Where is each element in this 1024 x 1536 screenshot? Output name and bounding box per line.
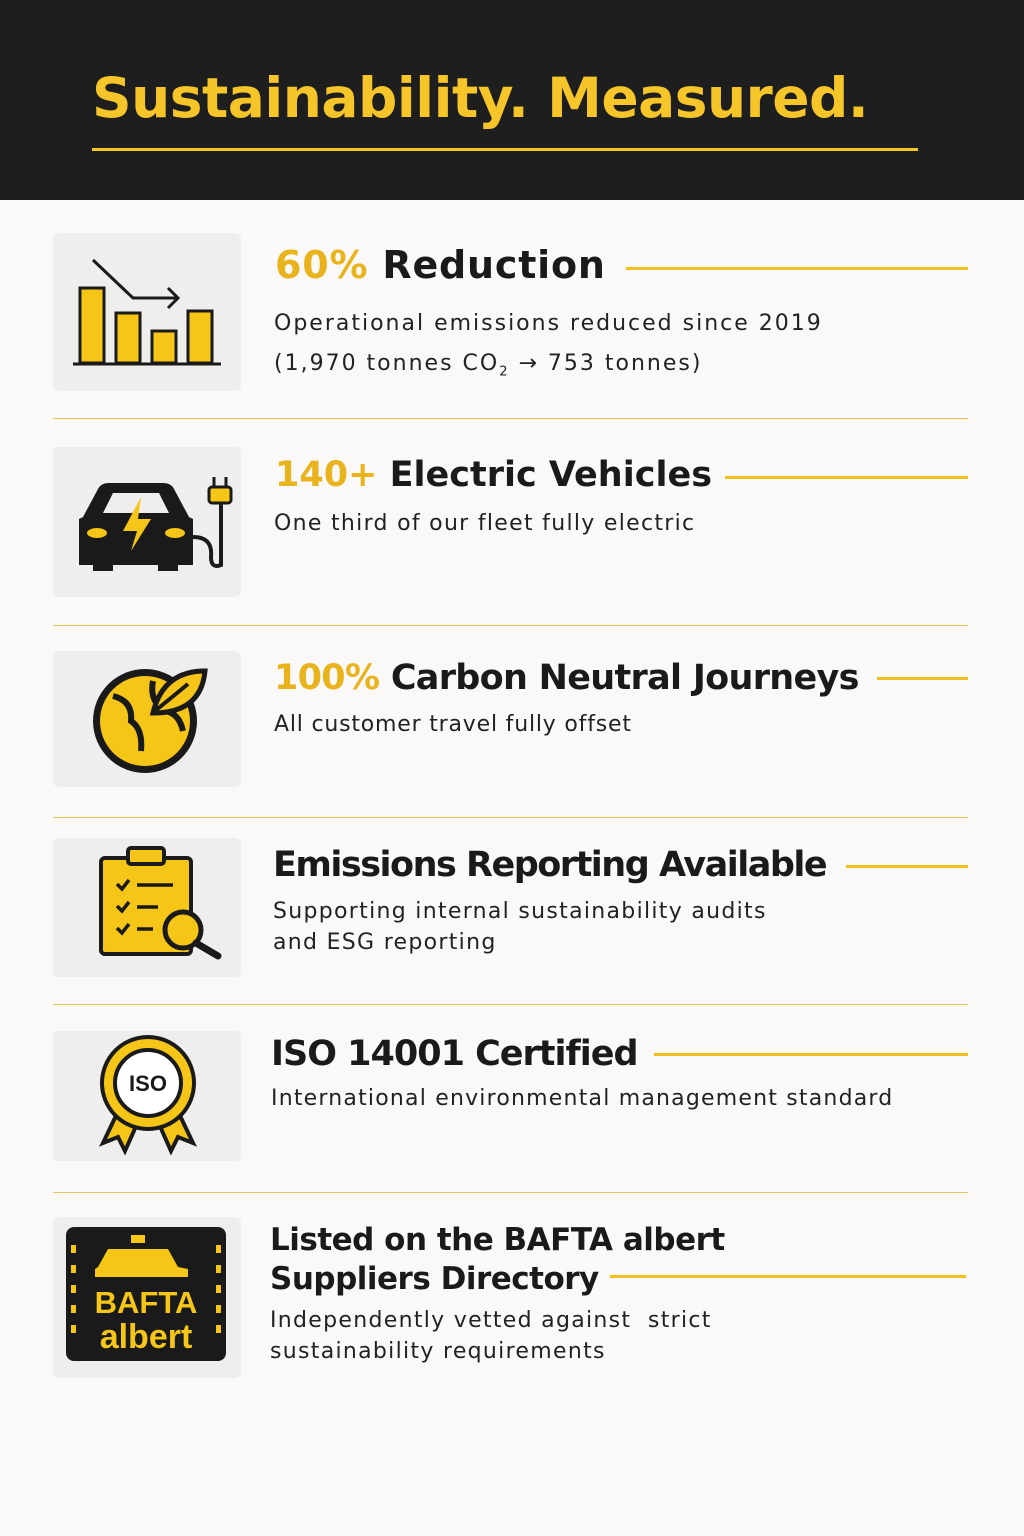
- icon: ISO badge: ISO: [129, 1071, 167, 1096]
- icon: ISO badge: [53, 1031, 241, 1161]
- heading: 60% Reduction: [275, 243, 606, 287]
- text: and ESG reporting: [273, 930, 497, 955]
- header: [0, 0, 1024, 200]
- icon: BAFTA albert: albert: [100, 1318, 192, 1356]
- text: (1,970 tonnes CO2 → 753 tonnes): [274, 351, 702, 379]
- row 2: [53, 447, 968, 597]
- icon: BAFTA albert: [53, 1217, 241, 1378]
- text: sustainability requirements: [270, 1339, 606, 1364]
- title: Sustainability. Measured.: [92, 66, 868, 130]
- text: Operational emissions reduced since 2019: [274, 311, 823, 336]
- row 6: [53, 1217, 966, 1378]
- text: All customer travel fully offset: [274, 712, 632, 737]
- text: One third of our fleet fully electric: [274, 511, 695, 536]
- heading: Suppliers Directory: [270, 1261, 599, 1297]
- heading: Emissions Reporting Available: [273, 845, 826, 885]
- text: [274, 311, 823, 379]
- row 3: [53, 651, 968, 787]
- row 4: [53, 838, 968, 977]
- row 1: [53, 233, 968, 391]
- icon: electric car: [53, 447, 241, 597]
- heading: [270, 1222, 725, 1297]
- heading: 140+ Electric Vehicles: [275, 455, 712, 495]
- text: International environmental management standard: [271, 1086, 893, 1111]
- icon: bar chart down: [53, 233, 241, 391]
- heading: ISO 14001 Certified: [271, 1034, 638, 1074]
- text: Supporting internal sustainability audits: [273, 899, 767, 924]
- heading: Listed on the BAFTA albert: [270, 1222, 725, 1258]
- icon: globe leaf: [53, 651, 241, 787]
- text: [270, 1308, 712, 1364]
- row 5: [53, 1031, 968, 1161]
- heading: 100% Carbon Neutral Journeys: [274, 658, 859, 698]
- icon: BAFTA albert: BAFTA: [95, 1285, 197, 1320]
- icon: clipboard: [53, 838, 241, 977]
- text: [273, 899, 767, 955]
- text: Independently vetted against strict: [270, 1308, 712, 1333]
